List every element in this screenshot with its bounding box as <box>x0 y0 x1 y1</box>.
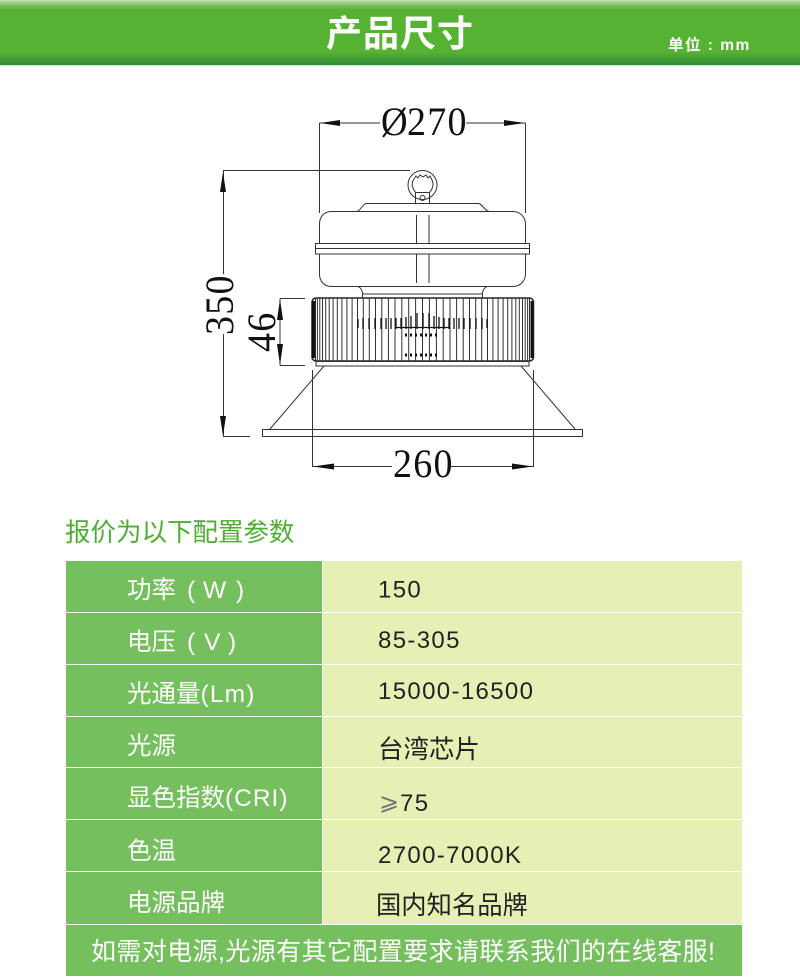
title: 产品尺寸 <box>326 13 474 54</box>
row: power: W <box>203 577 227 604</box>
row: voltage: 85-305 <box>378 627 461 654</box>
row: colour temperature: 2700-7000K <box>378 842 522 869</box>
row: colour rendering index <box>66 768 742 819</box>
unit note: 单位 : mm <box>668 35 751 54</box>
footer note <box>66 925 742 976</box>
width dimension: 270: Ø <box>381 101 408 144</box>
header banner <box>0 0 800 66</box>
row: voltage <box>66 613 742 664</box>
row: colour rendering index: 显色指数(CRI) <box>127 784 289 812</box>
height dimension: 350 <box>198 170 410 436</box>
row: voltage: 电压 <box>127 629 176 656</box>
height dimension: 350: 350 <box>198 274 242 335</box>
row: light source <box>66 717 742 767</box>
base width dimension: 260: 260 <box>393 442 454 486</box>
row: luminous flux <box>66 665 742 716</box>
footer note: 如需对电源,光源有其它配置要求请联系我们的在线客服! <box>91 938 715 966</box>
parameter table <box>66 561 742 976</box>
row: colour rendering index: 75 <box>400 790 429 817</box>
row: power: ( <box>187 577 196 604</box>
dimension drawing of the high bay lamp <box>198 100 583 486</box>
row: voltage: V <box>204 629 221 656</box>
driver housing <box>316 204 530 298</box>
subheading: 报价为以下配置参数 <box>65 519 295 547</box>
row: power: 功率 <box>127 577 176 604</box>
row: voltage: ( <box>187 629 196 656</box>
finned heat sink <box>312 298 534 361</box>
row: colour rendering index: ⩾ <box>379 788 400 816</box>
row: power: ) <box>236 577 244 604</box>
row: colour temperature <box>66 820 742 871</box>
row: light source: 光源 <box>127 732 176 760</box>
row: luminous flux: 光通量(Lm) <box>127 680 256 708</box>
width dimension: 270: 270 <box>407 100 468 144</box>
base width dimension: 260 <box>312 370 534 486</box>
row: light source: 台湾芯片 <box>378 736 480 764</box>
row: power <box>66 561 742 612</box>
hanging ring <box>408 170 437 204</box>
heat sink height dimension: 46: 46 <box>240 312 284 352</box>
row: voltage: ) <box>228 629 236 656</box>
row: driver brand <box>66 872 742 924</box>
reflector <box>262 362 582 436</box>
heat sink height dimension: 46 <box>240 298 305 366</box>
row: colour temperature: 色温 <box>127 837 176 865</box>
row: driver brand: 国内知名品牌 <box>376 892 528 920</box>
row: power: 150 <box>378 576 422 604</box>
row: driver brand: 电源品牌 <box>127 889 225 917</box>
width dimension: 270 <box>320 100 526 213</box>
row: luminous flux: 15000-16500 <box>378 678 534 705</box>
